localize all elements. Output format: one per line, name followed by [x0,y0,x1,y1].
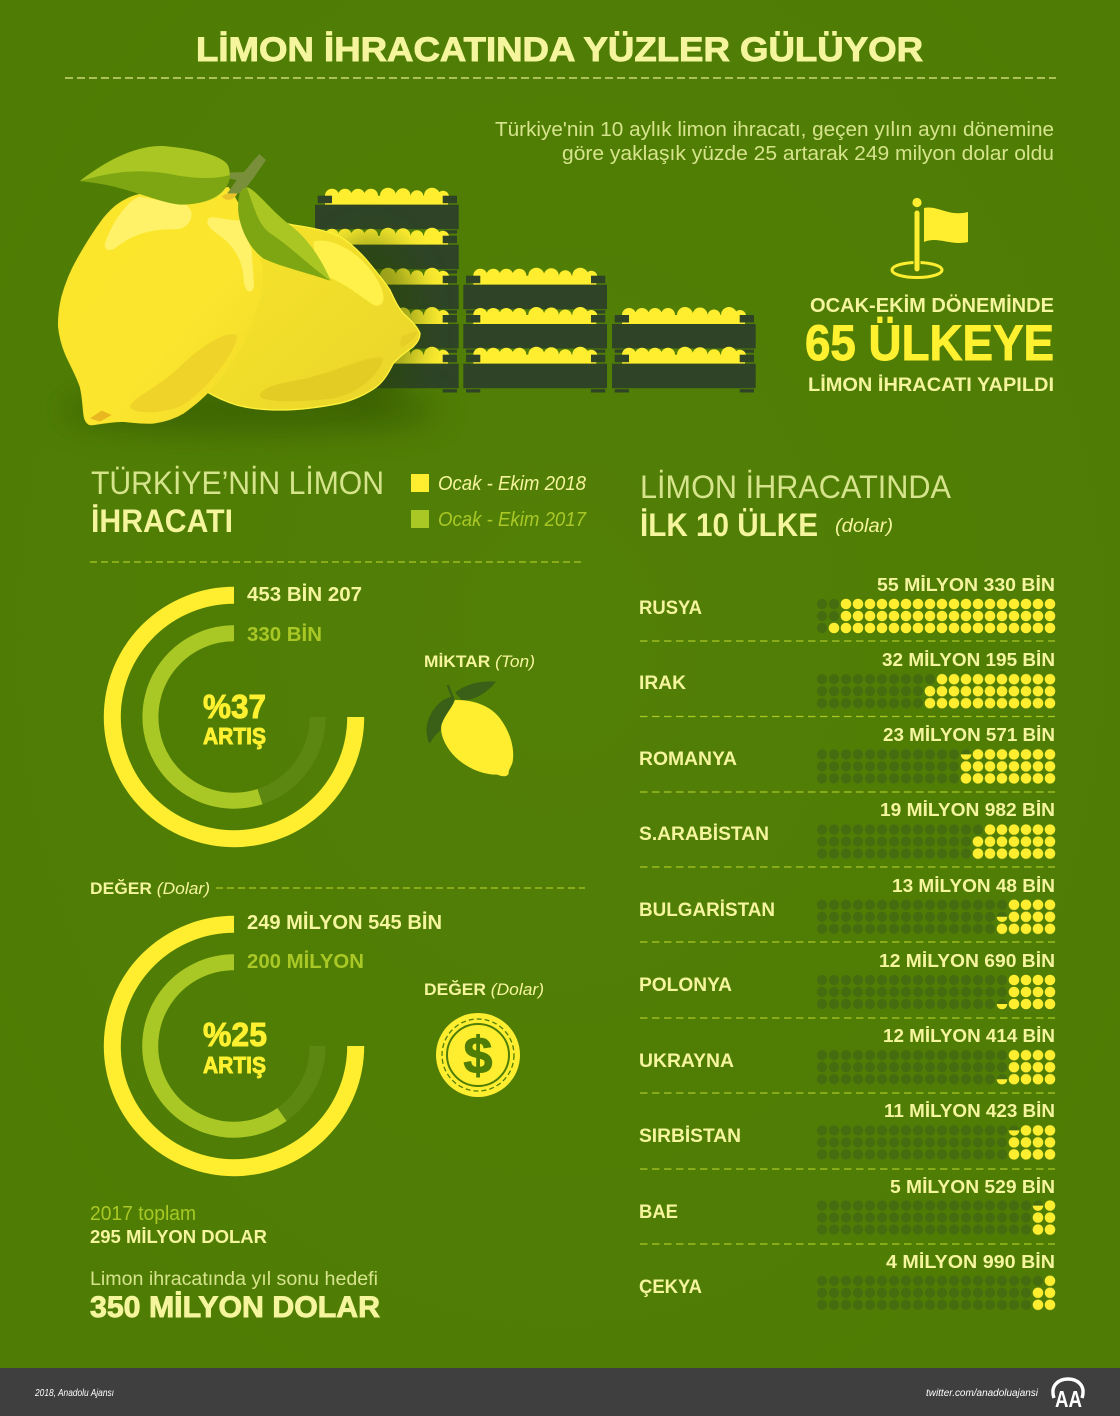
lemon shadow on crates [320,235,420,405]
ring chart: value: 200 MİLYON [247,950,364,973]
row: S.Arabistan: 19 MİLYON 982 BİN [880,800,1055,820]
callout: 65 countries [805,294,1054,396]
row: Rusya: 55 MİLYON 330 BİN [877,575,1055,595]
row: Irak: 32 MİLYON 195 BİN [882,650,1055,670]
right heading [640,469,952,543]
left heading: İHRACATI [91,503,233,539]
legend: Ocak - Ekim 2018 [438,473,586,495]
logo: AA: AA [1055,1386,1082,1412]
row: Polonya [639,951,1056,1018]
icon: lemon [427,681,513,776]
row: Rusya [639,575,1056,641]
row: Bulgaristan [639,876,1056,942]
row: S.Arabistan: S.ARABİSTAN [639,824,769,845]
year-end target: 350 MİLYON DOLAR [90,1291,380,1324]
label: value: DEĞER (Dolar) [424,980,544,999]
crates of lemons [315,188,756,392]
ring chart: value: 249 MİLYON 545 BİN [247,911,442,934]
footer [0,1368,1120,1416]
ring chart: quantity: ARTIŞ [203,723,266,749]
row: Ukrayna: 12 MİLYON 414 BİN [883,1026,1055,1046]
right heading: İLK 10 ÜLKE [640,507,818,543]
row: Ukrayna [639,1026,1056,1093]
row: Bulgaristan: BULGARİSTAN [639,900,775,921]
big lemons illustration [58,146,420,425]
callout: 65 countries: OCAK-EKİM DÖNEMİNDE [810,294,1054,317]
row: Sirbistan [639,1101,1056,1169]
lemon shadow [60,388,440,432]
legend: Ocak - Ekim 2017 [438,509,587,531]
footer: twitter.com/anadoluajansi [926,1388,1039,1399]
right lemon highlight [313,241,384,306]
row: S.Arabistan [639,800,1056,867]
icon: dollar coin: $ [464,1027,493,1085]
ring chart: value: %25 [203,1016,267,1053]
intro text [495,119,1054,165]
row: BAE: BAE [639,1202,678,1223]
right heading: LİMON İHRACATINDA [640,469,952,505]
row: Irak [639,650,1056,716]
ring chart: value: ARTIŞ [203,1052,266,1078]
title: LİMON İHRACATINDA YÜZLER GÜLÜYOR [196,31,923,69]
top leaf shade [80,171,230,205]
row: Romanya: ROMANYA [639,749,737,770]
flag icon [892,198,968,278]
left lemon [58,187,263,425]
2017 total: 295 MİLYON DOLAR [90,1226,267,1247]
top leaf [80,146,230,204]
stem [227,154,266,193]
right heading: (dolar) [835,516,893,537]
row: Ukrayna: UKRAYNA [639,1051,734,1072]
icon: dollar coin [436,1013,520,1097]
legend [411,473,587,531]
lower leaf [238,187,331,281]
year-end target [90,1269,380,1324]
section label: value: DEĞER (Dolar) [90,879,210,898]
row: BAE [639,1177,1056,1244]
2017 total: 2017 toplam [90,1203,196,1225]
row: Romanya [639,725,1056,792]
year-end target: Limon ihracatında yıl sonu hedefi [90,1269,378,1290]
left heading: TÜRKİYE’NİN LİMON [91,465,384,501]
right lemon shade [260,357,383,401]
row: Rusya: RUSYA [639,598,702,619]
row: Sirbistan: 11 MİLYON 423 BİN [884,1101,1055,1121]
row: Polonya: 12 MİLYON 690 BİN [879,951,1055,971]
left heading [91,465,384,539]
row: Çekya: 4 MİLYON 990 BİN [886,1252,1055,1272]
left lemon tip [90,411,112,422]
ring chart: value [112,911,442,1168]
intro text: Türkiye'nin 10 aylık limon ihracatı, geçen yılın aynı dönemine [495,119,1054,141]
callout: 65 countries: 65 ÜLKEYE [805,315,1054,371]
label: quantity: MİKTAR (Ton) [424,652,535,671]
left lemon highlight two [207,217,254,292]
logo: AA [1053,1379,1083,1412]
row: Polonya: POLONYA [639,975,732,996]
ring chart: quantity: 453 BİN 207 [247,583,362,606]
row: Irak: IRAK [639,673,686,694]
right lemon [207,222,420,410]
right lemon tip [400,332,417,348]
row: Romanya: 23 MİLYON 571 BİN [883,725,1055,745]
callout: 65 countries: LİMON İHRACATI YAPILDI [808,375,1054,396]
row: Çekya [639,1252,1056,1311]
left lemon shade [130,334,237,412]
row: BAE: 5 MİLYON 529 BİN [890,1177,1055,1197]
stem base spot [222,193,237,200]
left lemon highlight one [105,197,191,250]
ring chart: quantity: 330 BİN [247,623,322,646]
lower leaf shade [238,187,330,281]
row: Sirbistan: SIRBİSTAN [639,1126,741,1147]
row: Çekya: ÇEKYA [639,1277,702,1298]
footer: 2018, Anadolu Ajansı [34,1388,114,1399]
ring chart: quantity: %37 [203,688,266,725]
2017 total [90,1203,267,1247]
intro text: göre yaklaşık yüzde 25 artarak 249 milyon dolar oldu [562,143,1054,165]
row: Bulgaristan: 13 MİLYON 48 BİN [892,876,1055,896]
ring chart: quantity [112,583,362,839]
